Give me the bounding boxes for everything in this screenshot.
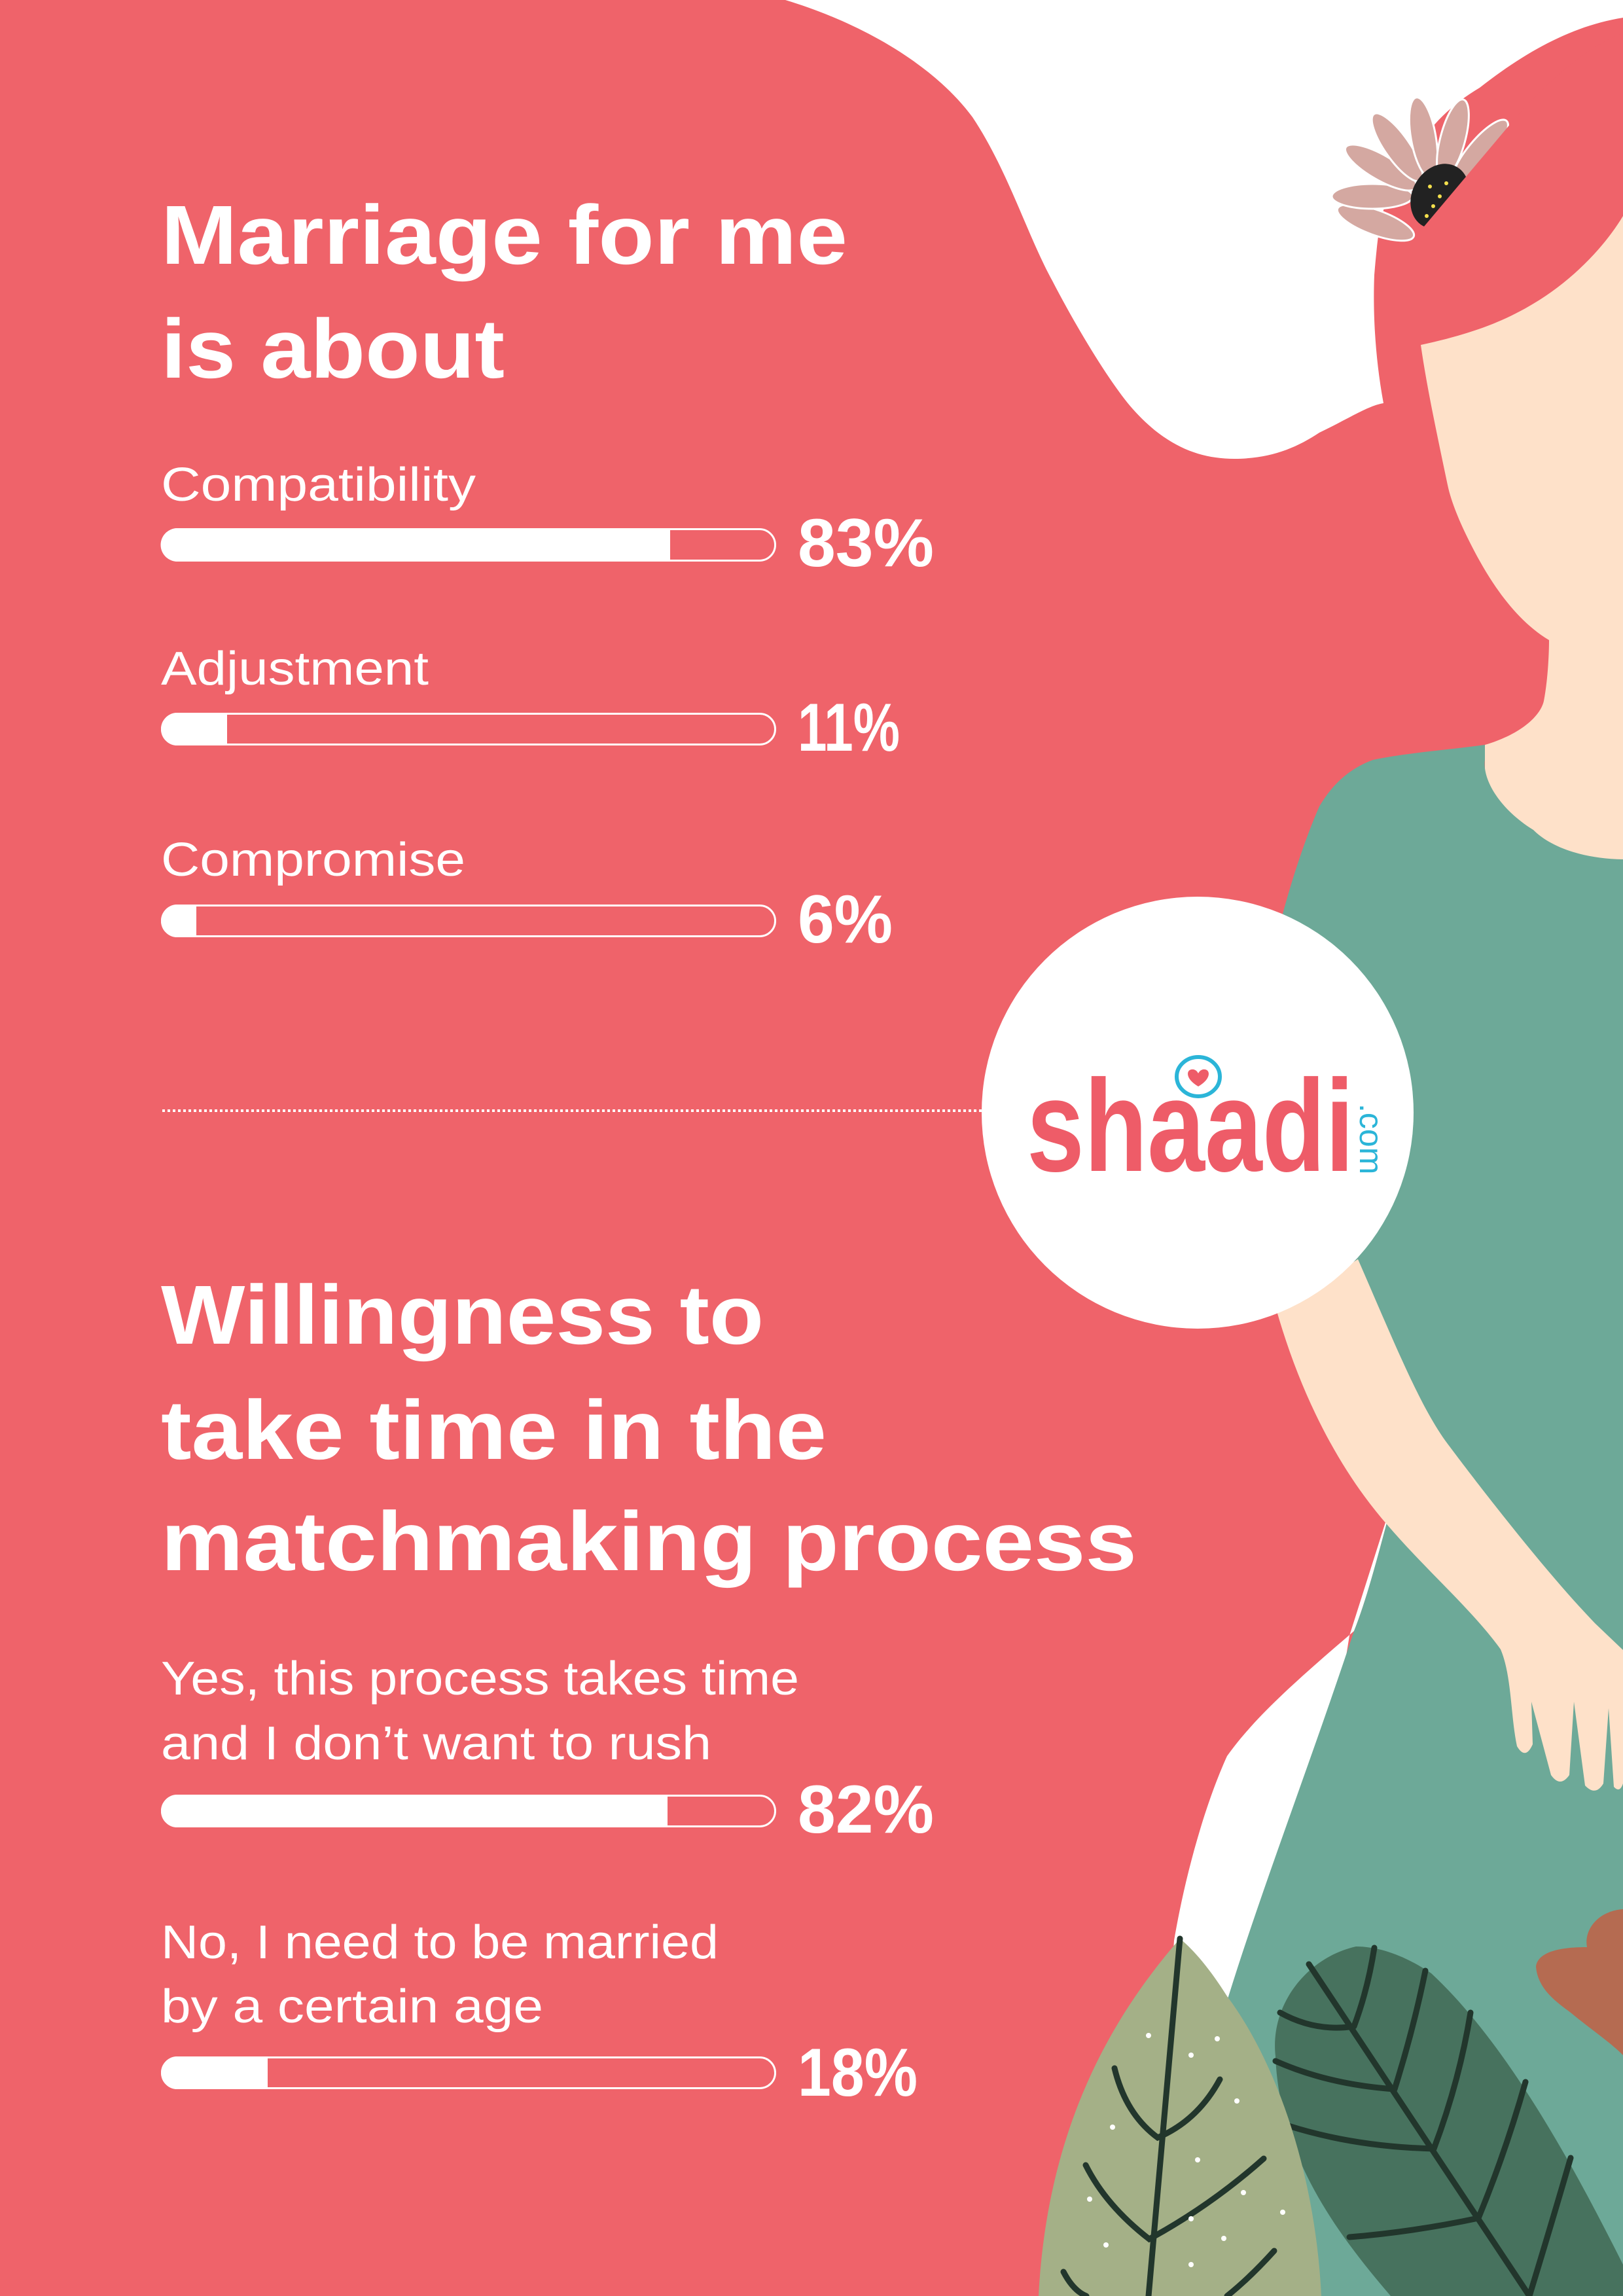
title: Marriage for me is about: [161, 188, 847, 396]
title: Willingness to take time in the matchmaking process: matchmaking process: [161, 1495, 1137, 1588]
bar item: Adjustment 11%: Adjustment: [161, 643, 429, 695]
bar item: Compromise 6%: 6%: [798, 882, 893, 958]
leaf: light green: [1039, 1939, 1321, 2296]
leaf: dark green: [1275, 1946, 1623, 2296]
bar item: No 18%: [161, 1916, 918, 2111]
logo: shaadi.com circle: .com: [1353, 1103, 1389, 1174]
icon: hair flower: [1332, 33, 1623, 327]
bar item: Compatibility 83%: [161, 459, 934, 581]
bar item: Yes 82%: 82%: [798, 1772, 934, 1848]
logo: shaadi.com circle: [982, 897, 1414, 1329]
illustration: woman: [1152, 216, 1623, 2296]
bar item: Adjustment 11%: 11%: [798, 690, 900, 766]
title: Willingness to take time in the matchmaking process: take time in the: [161, 1384, 827, 1477]
bar item: Yes 82%: [161, 1653, 934, 1848]
face and neck: [1421, 216, 1623, 916]
title: Willingness to take time in the matchmaking process: [161, 1268, 1137, 1588]
bar item: Yes 82%: Yes, this process takes time: [161, 1653, 799, 1705]
bar item: Adjustment 11%: [161, 643, 900, 766]
logo: shaadi.com circle: shaadi: [1027, 1053, 1354, 1199]
title: Marriage for me is about: is about: [161, 302, 505, 396]
arm and hand: [1276, 1259, 1623, 1791]
bar item: No 18%: by a certain age: [161, 1981, 543, 2033]
dress: [1152, 745, 1623, 2296]
bar item: Yes 82%: and I don’t want to rush: [161, 1717, 711, 1770]
bar item: Compatibility 83%: Compatibility: [161, 459, 476, 511]
title: Marriage for me is about: Marriage for me: [161, 188, 847, 282]
bar item: Compromise 6%: Compromise: [161, 834, 465, 886]
title: Willingness to take time in the matchmaking process: Willingness to: [161, 1268, 764, 1362]
bar item: No 18%: 18%: [798, 2035, 918, 2111]
bar item: No 18%: No, I need to be married: [161, 1916, 719, 1969]
bar item: Compatibility 83%: 83%: [798, 505, 934, 581]
background: lower white region: [1152, 1494, 1395, 2296]
leaf: brown: [1536, 1909, 1623, 2055]
bar item: Compromise 6%: [161, 834, 893, 958]
background: top white region: [785, 0, 1623, 459]
hair overlapping flower: [1414, 33, 1623, 327]
